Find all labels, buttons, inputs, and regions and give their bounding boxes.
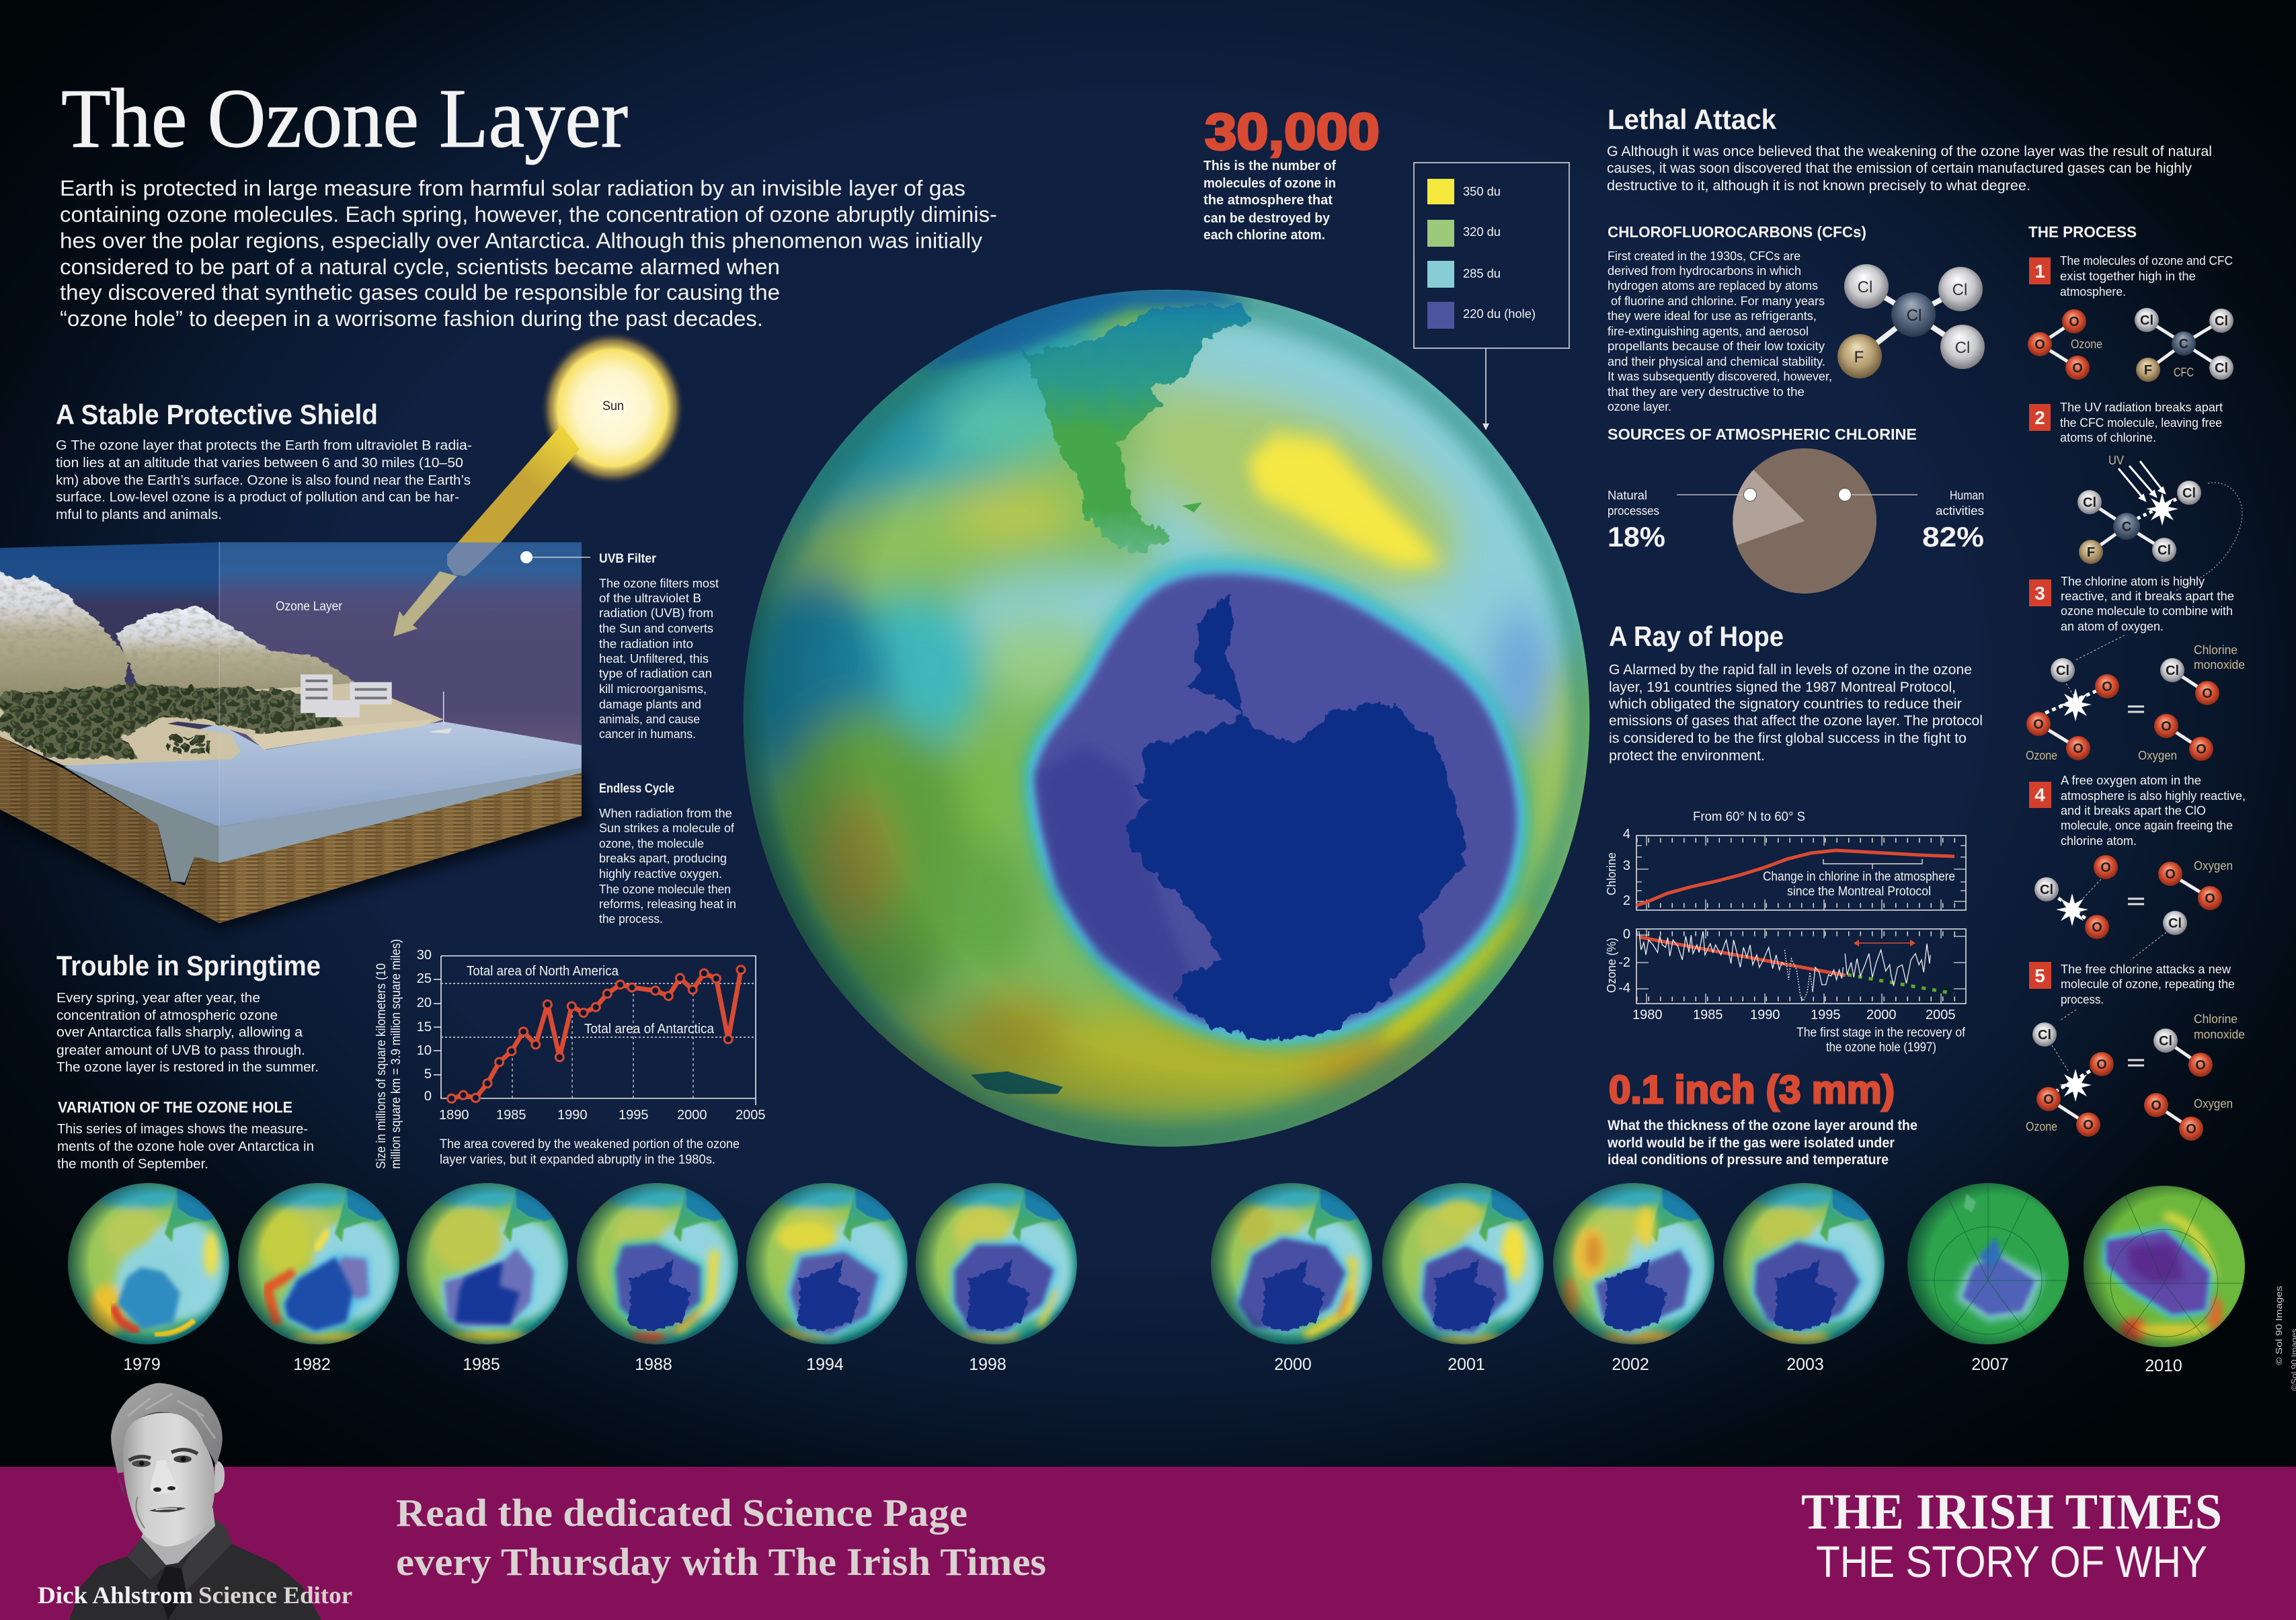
panel: a ray of hope: emissions of gases that affect the ozone layer. The protocol	[1609, 713, 1983, 729]
icon: reaction step 5: Oxygen	[2194, 1097, 2233, 1110]
chart caption: layer varies, but it expanded abruptly in the 1980s.	[440, 1153, 715, 1167]
legend: ozone levels: 285 du	[1463, 267, 1501, 280]
chart: ozone percent change: 1995	[1811, 1008, 1841, 1022]
chart: ozone percent change: 2005	[1926, 1008, 1955, 1022]
text: endless cycle	[599, 782, 736, 926]
icon: large CFC molecule: Cl	[1952, 281, 1967, 299]
icon: CFC molecule step 1: CFC	[2174, 366, 2194, 379]
text: uvb filter: the radiation into	[599, 637, 693, 651]
panel: variation of the ozone hole: ments of the ozone hole over Antarctica in	[57, 1139, 314, 1154]
chart: chlorine in the atmosphere: 2	[1623, 893, 1630, 908]
icon: reaction step 5: Chlorine	[2194, 1012, 2238, 1026]
intro text block: “ozone hole” to deepen in a worrisome fashion during the past decades.	[60, 307, 763, 331]
year labels: 1979	[123, 1355, 161, 1374]
panel: chlorofluorocarbons text: CHLOROFLUOROCARBONS (CFCs)	[1608, 223, 1866, 241]
stat: ozone thickness: world would be if the gas were isolated under	[1607, 1135, 1895, 1151]
callout: uvb marker	[520, 551, 590, 563]
icon: reaction step 3: O	[2033, 717, 2044, 732]
text: uvb filter: type of radiation can	[599, 667, 712, 680]
panel: a ray of hope: A Ray of Hope	[1609, 620, 1784, 652]
intro text block: Earth is protected in large measure from harmful solar radiation by an invisible layer of gas	[60, 176, 965, 200]
panel: variation of the ozone hole	[57, 1098, 314, 1172]
panel: trouble in springtime: over Antarctica falls sharply, allowing a	[56, 1024, 303, 1040]
icon: UV radiation breaking CFC: F	[2087, 545, 2095, 560]
panel: a ray of hope: G Alarmed by the rapid fall in levels of ozone in the ozone	[1609, 662, 1972, 678]
panel: chlorofluorocarbons text: hydrogen atoms are replaced by atoms	[1608, 279, 1818, 292]
icon: reaction step 3: Cl	[2056, 663, 2069, 678]
icon: CFC molecule step 1: Cl	[2215, 314, 2228, 329]
footer message: Read the dedicated Science Page	[396, 1491, 967, 1535]
icon: reaction step 4: Cl	[2168, 916, 2182, 931]
legend: ozone levels: 350 du	[1463, 185, 1501, 198]
logo: the irish times	[1801, 1484, 2222, 1586]
panel: trouble in springtime	[56, 950, 321, 1075]
intro text block: they discovered that synthetic gases could be responsible for causing the	[60, 280, 780, 305]
chart: ozone hole area by year: 1890	[439, 1108, 469, 1123]
panel: chlorofluorocarbons text: First created in the 1930s, CFCs are	[1608, 249, 1800, 263]
intro text block: containing ozone molecules. Each spring, however, the concentration of ozone abruptly diminis-	[60, 202, 997, 227]
panel: a ray of hope	[1608, 620, 1983, 764]
step 5 text: process.	[2061, 993, 2104, 1006]
icon: reaction step 3: O	[2102, 680, 2112, 694]
step 1 text: 1	[2034, 261, 2045, 282]
logo: the irish times: THE STORY OF WHY	[1816, 1537, 2207, 1586]
step 2 text	[2029, 401, 2223, 444]
text: uvb filter: damage plants and	[599, 698, 701, 711]
title: The Ozone Layer	[61, 73, 628, 165]
icon: reaction step 4: O	[2100, 860, 2111, 875]
icon: UV radiation breaking CFC: C	[2122, 520, 2131, 534]
text: endless cycle: breaks apart, producing	[599, 852, 727, 865]
panel: chlorofluorocarbons text: that they are very destructive to the	[1608, 385, 1805, 399]
step 3 text: 3	[2034, 583, 2045, 604]
text: endless cycle: the process.	[599, 912, 663, 926]
icon: reaction step 4: O	[2165, 867, 2176, 882]
chart: chlorine in the atmosphere: From 60° N to 60° S	[1693, 809, 1805, 824]
legend: ozone levels: 220 du (hole)	[1463, 307, 1536, 321]
icon: large CFC molecule: Cl	[1858, 278, 1872, 296]
stat: 30,000: can be destroyed by	[1203, 211, 1331, 226]
panel: chlorofluorocarbons text: and their physical and chemical stability.	[1608, 355, 1825, 368]
photo: science editor portrait	[69, 1383, 321, 1620]
stat: 30,000: molecules of ozone in	[1203, 176, 1336, 191]
icon: sun	[541, 331, 684, 485]
icon: reaction step 5: Cl	[2038, 1028, 2051, 1043]
text: endless cycle: reforms, releasing heat in	[599, 897, 736, 911]
chart: ozone hole area by year: 2000	[677, 1108, 707, 1123]
icon: large CFC molecule: F	[1854, 348, 1864, 366]
step 3 text: ozone molecule to combine with	[2061, 604, 2233, 618]
step 2 text: the CFC molecule, leaving free	[2060, 416, 2222, 430]
text: endless cycle: The ozone molecule then	[599, 883, 731, 896]
icon: ozone molecule step 1: Ozone	[2071, 337, 2102, 351]
arrow: solar radiation beam	[393, 425, 580, 637]
globe: main ozone hole map	[734, 186, 1667, 1147]
globe 1998	[916, 1183, 1077, 1344]
icon: reaction step 3: O	[2202, 686, 2213, 701]
chart: ozone hole area by year: 20	[417, 996, 432, 1010]
chart: chlorine in the atmosphere: since the Montreal Protocol	[1787, 885, 1931, 899]
icon: large CFC molecule: Cl	[1955, 339, 1970, 357]
text: endless cycle: Endless Cycle	[599, 782, 674, 796]
step 5 text: The free chlorine attacks a new	[2061, 963, 2231, 976]
panel: lethal attack: Lethal Attack	[1608, 104, 1777, 135]
step 5 text: molecule of ozone, repeating the	[2061, 977, 2235, 991]
step 3 text: The chlorine atom is highly	[2061, 575, 2205, 588]
panel: sources of atmospheric chlorine pie: 18%	[1608, 521, 1665, 553]
chart: chlorine in the atmosphere: 3	[1623, 858, 1630, 873]
year labels: 2002	[1612, 1355, 1649, 1374]
chart: ozone hole area by year: 0	[424, 1089, 432, 1104]
icon: reaction step 5: O	[2096, 1057, 2107, 1072]
text: uvb filter: cancer in humans.	[599, 727, 696, 741]
year labels: 1982	[293, 1355, 331, 1374]
year labels: 2003	[1786, 1355, 1824, 1374]
intro text block: considered to be part of a natural cycle, scientists became alarmed when	[60, 255, 780, 279]
panel: stable protective shield text: tion lies at an altitude that varies between 6 and 30 miles (10–50	[56, 456, 463, 471]
chart: ozone percent change: 1990	[1750, 1008, 1780, 1022]
text: uvb filter: The ozone filters most	[599, 577, 719, 590]
label: ozone layer: Ozone Layer	[276, 600, 343, 614]
panel: the process heading: THE PROCESS	[2028, 223, 2137, 241]
step 1 text: The molecules of ozone and CFC	[2060, 254, 2233, 268]
icon: reaction step 3: O	[2196, 742, 2207, 757]
intro text block: hes over the polar regions, especially over Antarctica. Although this phenomenon was initially	[60, 229, 982, 253]
text: uvb filter: the Sun and converts	[599, 622, 713, 635]
footer message: every Thursday with The Irish Times	[396, 1540, 1046, 1584]
chart: ozone percent change: 1985	[1693, 1008, 1723, 1022]
chart: ozone percent change: -4	[1618, 981, 1630, 996]
globe 1979	[68, 1183, 229, 1344]
panel: stable protective shield text	[56, 399, 472, 522]
globe 1985	[407, 1183, 568, 1344]
globe 2001	[1382, 1183, 1544, 1344]
icon: reaction step 5: O	[2043, 1092, 2054, 1107]
step 4 text: 4	[2034, 784, 2045, 805]
icon: CFC molecule step 1: Cl	[2140, 313, 2153, 328]
icon: reaction step 5: Ozone	[2026, 1120, 2057, 1133]
chart: ozone hole area by year: 30	[417, 948, 432, 963]
stat: ozone thickness: What the thickness of the ozone layer around the	[1608, 1118, 1917, 1133]
globe 1982	[238, 1183, 399, 1344]
chart: ozone percent change: The first stage in the recovery of	[1796, 1026, 1966, 1040]
panel: chlorofluorocarbons text: they were ideal for use as refrigerants,	[1608, 309, 1817, 323]
copyright: © Sol 90 Images	[2274, 1285, 2284, 1365]
step 4 text: and it breaks apart the ClO	[2061, 804, 2206, 817]
icon: reaction step 3: Ozone	[2026, 749, 2057, 762]
year labels: 2007	[1971, 1355, 2009, 1374]
chart: ozone hole area by year: Total area of Antarctica	[584, 1022, 715, 1037]
icon: reaction step 4: O	[2205, 891, 2215, 906]
icon: reaction step 5: O	[2195, 1058, 2206, 1073]
panel: sources of atmospheric chlorine pie: SOURCES OF ATMOSPHERIC CHLORINE	[1608, 426, 1917, 443]
chart: ozone hole area by year: Total area of North America	[467, 964, 619, 979]
panel: a ray of hope: which obligated the signatory countries to reduce their	[1608, 696, 1962, 712]
stat: 30,000: each chlorine atom.	[1203, 228, 1325, 243]
globe 2000	[1211, 1183, 1372, 1344]
icon: sun: Sun	[602, 399, 624, 413]
chart: ozone hole area by year: 25	[417, 971, 432, 986]
step 3 text: an atom of oxygen.	[2061, 620, 2164, 633]
text: endless cycle: When radiation from the	[599, 807, 732, 820]
stat: ozone thickness: ideal conditions of pressure and temperature	[1608, 1152, 1889, 1168]
icon: reaction step 5: monoxide	[2194, 1028, 2245, 1041]
panel: sources of atmospheric chlorine pie: Human	[1950, 489, 1984, 502]
icon: CFC molecule step 1	[2135, 308, 2233, 382]
illustration: coastal block with atmosphere	[0, 542, 592, 932]
panel: lethal attack: G Although it was once believed that the weakening of the ozone layer was the result of natural	[1607, 144, 2212, 159]
chart: ozone percent change: 0	[1623, 927, 1630, 942]
panel: sources of atmospheric chlorine pie: processes	[1608, 504, 1659, 518]
globe 2007	[1907, 1183, 2069, 1344]
chart: chlorine in the atmosphere: 4	[1623, 827, 1630, 842]
icon: reaction step 3: Oxygen	[2138, 749, 2177, 762]
logo: the irish times: THE IRISH TIMES	[1801, 1484, 2222, 1540]
panel: variation of the ozone hole: the month of September.	[57, 1156, 208, 1172]
panel: sources of atmospheric chlorine pie: Natural	[1608, 489, 1647, 502]
chart: ozone hole area by year	[374, 939, 765, 1169]
icon: reaction step 3: monoxide	[2194, 658, 2245, 672]
icon: reaction step 5: O	[2186, 1122, 2196, 1137]
panel: chlorofluorocarbons text: fire-extinguishing agents, and aerosol	[1608, 325, 1809, 338]
chart caption: The area covered by the weakened portion of the ozone	[440, 1137, 740, 1151]
panel: trouble in springtime: concentration of atmospheric ozone	[56, 1008, 278, 1023]
icon: ozone molecule step 1: O	[2034, 337, 2045, 352]
step 1 text: atmosphere.	[2060, 285, 2126, 298]
text: science editor credit: Science Editor	[198, 1582, 352, 1609]
panel: a ray of hope: layer, 191 countries signed the 1987 Montreal Protocol,	[1609, 680, 1956, 695]
icon: reaction step 5: Cl	[2159, 1034, 2172, 1049]
chart: ozone hole area by year: 15	[417, 1020, 432, 1035]
step 4 text: A free oxygen atom in the	[2061, 774, 2201, 787]
intro text block	[60, 176, 997, 331]
panel: trouble in springtime: The ozone layer is restored in the summer.	[56, 1059, 319, 1075]
year labels	[123, 1355, 2182, 1375]
panel: lethal attack: causes, it was soon discovered that the emission of certain manufactured gases can be highly	[1607, 161, 2192, 176]
panel: variation of the ozone hole: VARIATION OF THE OZONE HOLE	[58, 1098, 292, 1116]
icon: reaction step 5	[2026, 1010, 2245, 1141]
step 3 text	[2029, 575, 2234, 633]
stat: ozone thickness	[1607, 1068, 1917, 1168]
stat: ozone thickness: 0.1 inch (3 mm)	[1609, 1068, 1895, 1112]
text: uvb filter: heat. Unfiltered, this	[599, 652, 709, 665]
panel: lethal attack	[1607, 104, 2212, 194]
icon: reaction step 5: O	[2083, 1118, 2094, 1133]
year labels: 2000	[1274, 1355, 1312, 1374]
year labels: 1988	[635, 1355, 672, 1374]
panel: a ray of hope: protect the environment.	[1609, 748, 1765, 764]
chart: ozone hole area by year: 1990	[557, 1108, 588, 1123]
panel: variation of the ozone hole: This series of images shows the measure-	[57, 1121, 308, 1137]
icon: reaction step 3: Cl	[2166, 663, 2179, 678]
text: uvb filter: animals, and cause	[599, 713, 700, 726]
globe 1988	[577, 1183, 738, 1344]
icon: reaction step 5: O	[2151, 1098, 2162, 1113]
chart: ozone percent change: -2	[1618, 955, 1630, 970]
year labels: 2001	[1448, 1355, 1485, 1374]
panel: chlorofluorocarbons text: It was subsequently discovered, however,	[1608, 370, 1832, 383]
chart: ozone hole area by year: million square km = 3.9 million square miles)	[389, 939, 403, 1169]
panel: stable protective shield text: G The ozone layer that protects the Earth from ultraviolet B radia-	[56, 438, 472, 453]
stat: 30,000: the atmosphere that	[1203, 193, 1333, 208]
globe 2010	[2083, 1185, 2246, 1348]
panel: chlorofluorocarbons text: ozone layer.	[1608, 400, 1671, 413]
text: science editor credit	[38, 1582, 352, 1609]
icon: reaction step 3: Chlorine	[2194, 643, 2238, 657]
panel: lethal attack: destructive to it, although it is not known precisely to what degree.	[1607, 178, 2030, 194]
text: uvb filter	[599, 552, 719, 741]
icon: large CFC molecule	[1837, 264, 1985, 378]
text: endless cycle: ozone, the molecule	[599, 837, 704, 850]
legend: ozone levels: 320 du	[1463, 225, 1501, 239]
icon: reaction step 3: O	[2161, 719, 2172, 734]
panel: stable protective shield text: A Stable Protective Shield	[56, 399, 378, 430]
step 2 text: atoms of chlorine.	[2060, 431, 2156, 444]
chart caption	[440, 1137, 740, 1167]
icon: UV radiation breaking CFC	[2077, 454, 2242, 592]
chart: chlorine in the atmosphere: Change in chlorine in the atmosphere	[1763, 870, 1955, 884]
year labels: 1985	[463, 1355, 500, 1374]
text: uvb filter: UVB Filter	[599, 552, 657, 566]
text: uvb filter: kill microorganisms,	[599, 682, 707, 696]
arrow: legend to globe	[1482, 348, 1489, 430]
icon: reaction step 4: Oxygen	[2194, 859, 2233, 873]
step 4 text	[2029, 774, 2246, 848]
year labels: 2010	[2145, 1356, 2182, 1375]
stat: 30,000	[1203, 104, 1380, 243]
icon: UV radiation breaking CFC: UV	[2108, 454, 2124, 467]
copyright	[2274, 1285, 2296, 1391]
footer band	[0, 1467, 2296, 1620]
panel: stable protective shield text: km) above the Earth’s surface. Ozone is also found near the Earth’s	[56, 473, 471, 488]
icon: UV radiation breaking CFC: Cl	[2182, 486, 2196, 501]
text: science editor credit: Dick Ahlstrom	[38, 1582, 193, 1609]
globe 2002	[1553, 1183, 1714, 1344]
text: endless cycle: highly reactive oxygen.	[599, 867, 722, 881]
panel: a ray of hope: is considered to be the first global success in the fight to	[1609, 731, 1967, 746]
text: endless cycle: Sun strikes a molecule of	[599, 821, 735, 835]
panel: sources of atmospheric chlorine pie: 82%	[1922, 521, 1984, 553]
icon: reaction step 3: O	[2073, 741, 2084, 756]
chart: chlorine in the atmosphere	[1605, 809, 1966, 910]
step 4 text: atmosphere is also highly reactive,	[2061, 789, 2246, 803]
chart: ozone percent change: 1980	[1632, 1008, 1662, 1022]
chart: ozone hole area by year: 5	[424, 1067, 432, 1082]
panel: stable protective shield text: surface. Low-level ozone is a product of pollution and can be har-	[56, 490, 459, 505]
panel: chlorofluorocarbons text: propellants because of their low toxicity	[1608, 339, 1825, 353]
icon: CFC molecule step 1: Cl	[2215, 361, 2228, 376]
chart: ozone hole area by year: Size in millions of square kilometers (10	[374, 963, 389, 1169]
globe 2003	[1723, 1183, 1885, 1344]
step 2 text: The UV radiation breaks apart	[2060, 401, 2223, 414]
icon: CFC molecule step 1: C	[2179, 337, 2188, 352]
icon: ozone molecule step 1: O	[2072, 361, 2083, 376]
step 1 text: exist together high in the	[2060, 270, 2196, 283]
year labels: 1998	[969, 1355, 1006, 1374]
icon: reaction step 4	[2034, 855, 2233, 960]
chart: ozone hole area by year: 1995	[619, 1108, 648, 1123]
step 5 text	[2029, 962, 2235, 1006]
panel: chlorofluorocarbons text	[1608, 223, 1866, 413]
panel: sources of atmospheric chlorine pie: activities	[1936, 504, 1984, 518]
step 4 text: molecule, once again freeing the	[2061, 819, 2233, 832]
icon: CFC molecule step 1: F	[2144, 363, 2152, 378]
legend: ozone levels	[1414, 163, 1569, 348]
chart: ozone percent change	[1605, 927, 1966, 1055]
footer message	[396, 1491, 1046, 1584]
stat: 30,000: 30,000	[1205, 104, 1380, 161]
chart: chlorine in the atmosphere: Chlorine	[1605, 852, 1618, 895]
panel: trouble in springtime: Trouble in Springtime	[56, 950, 321, 981]
step 4 text: chlorine atom.	[2061, 834, 2137, 848]
icon: reaction step 4: O	[2092, 920, 2102, 935]
year labels: 1994	[806, 1355, 844, 1374]
chart: ozone hole area by year: 10	[417, 1043, 432, 1058]
step 1 text	[2029, 254, 2233, 298]
panel: chlorofluorocarbons text: derived from hydrocarbons in which	[1608, 264, 1801, 278]
step 5 text: 5	[2034, 965, 2045, 986]
chart: ozone percent change: the ozone hole (1997)	[1826, 1041, 1936, 1055]
panel: sources of atmospheric chlorine pie	[1608, 426, 1984, 594]
panel: stable protective shield text: mful to plants and animals.	[56, 508, 222, 522]
icon: ozone molecule step 1	[2028, 309, 2102, 380]
panel: trouble in springtime: greater amount of UVB to pass through.	[56, 1043, 305, 1058]
chart: ozone percent change: Ozone (%)	[1605, 938, 1618, 993]
panel: trouble in springtime: Every spring, year after year, the	[56, 990, 260, 1006]
chart: ozone percent change: 2000	[1866, 1008, 1896, 1022]
icon: reaction step 4: Cl	[2040, 883, 2053, 897]
panel: chlorofluorocarbons text: of fluorine and chlorine. For many years	[1611, 294, 1825, 308]
icon: UV radiation breaking CFC: Cl	[2158, 543, 2171, 558]
icon: large CFC molecule: Cl	[1907, 307, 1922, 325]
text: uvb filter: radiation (UVB) from	[599, 606, 713, 620]
icon: UV radiation breaking CFC: Cl	[2083, 495, 2096, 510]
step 2 text: 2	[2034, 407, 2045, 428]
stat: 30,000: This is the number of	[1203, 159, 1336, 173]
chart: ozone hole area by year: 2005	[736, 1108, 765, 1123]
icon: ozone molecule step 1: O	[2069, 315, 2080, 329]
globe 1994	[746, 1183, 908, 1344]
step 3 text: reactive, and it breaks apart the	[2061, 590, 2234, 603]
icon: reaction step 3	[2026, 635, 2245, 762]
chart: ozone hole area by year: 1985	[496, 1108, 526, 1123]
text: uvb filter: of the ultraviolet B	[599, 592, 701, 605]
